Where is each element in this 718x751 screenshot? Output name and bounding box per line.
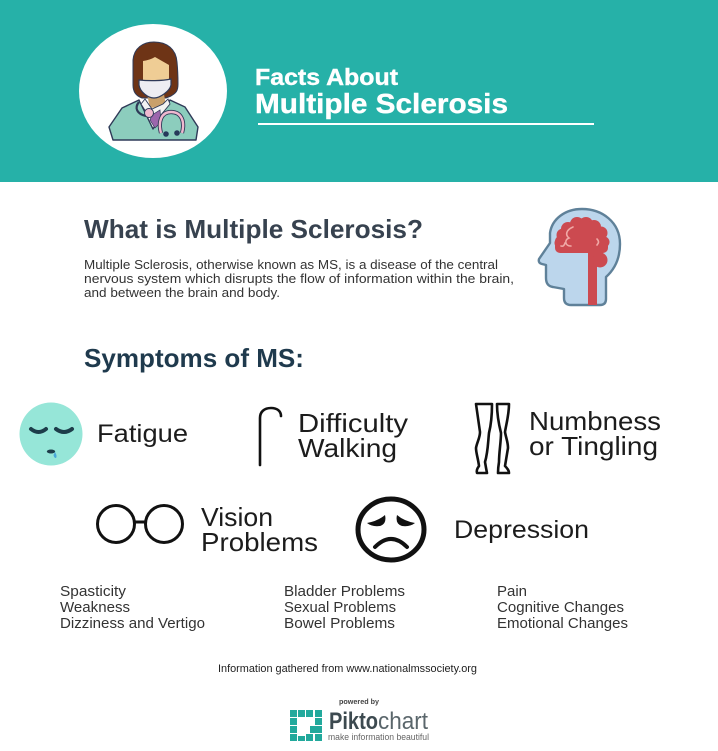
list: other symptoms column 2 <box>284 583 405 632</box>
list: other symptoms column 1: Weakness <box>60 599 130 616</box>
list: other symptoms column 1 <box>60 583 205 632</box>
symptom: numbness or tingling <box>476 404 661 473</box>
list: other symptoms column 3: Cognitive Changes <box>497 599 624 616</box>
list: other symptoms column 3 <box>497 583 628 632</box>
list: other symptoms column 2: Bladder Problems <box>284 583 405 600</box>
heading: symptoms: Symptoms of MS: <box>84 343 304 373</box>
label: difficulty walking: Difficulty <box>298 408 408 438</box>
icon: cane <box>260 408 281 465</box>
text block: definition: Multiple Sclerosis, otherwise known as MS, is a disease of the central <box>84 257 498 272</box>
piktochart logo: make information beautiful <box>328 732 429 742</box>
label: difficulty walking <box>298 408 408 463</box>
list: other symptoms column 2: Bowel Problems <box>284 615 395 632</box>
label: vision problems: Problems <box>201 527 318 557</box>
title: Multiple Sclerosis <box>255 88 508 119</box>
icon: sleepy face <box>20 402 82 466</box>
label: numbness or tingling: Numbness <box>529 406 661 436</box>
icon: legs <box>476 404 509 473</box>
piktochart logo: powered by <box>339 697 380 706</box>
list: other symptoms column 2: Sexual Problems <box>284 599 396 616</box>
label: vision problems: Vision <box>201 502 273 532</box>
symptom: depression: Depression <box>454 516 589 544</box>
header banner <box>0 0 718 182</box>
list: other symptoms column 1: Dizziness and Vertigo <box>60 615 205 632</box>
text block: definition: nervous system which disrupts the flow of information within the brain, <box>84 271 514 286</box>
icon: doctor in mask <box>79 24 227 158</box>
symptom: depression <box>358 499 589 560</box>
symptom: difficulty walking <box>260 408 408 465</box>
icon: head with brain <box>539 209 620 305</box>
icon: glasses <box>98 506 182 542</box>
heading: what is MS: What is Multiple Sclerosis? <box>84 214 423 244</box>
symptom: vision problems <box>98 502 318 557</box>
list: other symptoms column 1: Spasticity <box>60 583 126 600</box>
label: numbness or tingling <box>529 406 661 461</box>
label: numbness or tingling: or Tingling <box>529 431 658 461</box>
icon: logo mark <box>290 710 322 741</box>
list: other symptoms column 3: Emotional Changes <box>497 615 628 632</box>
text block: definition <box>84 257 514 300</box>
label: vision problems <box>201 502 318 557</box>
list: other symptoms column 3: Pain <box>497 583 527 600</box>
symptom: fatigue <box>20 402 188 466</box>
piktochart logo <box>290 697 429 742</box>
icon: sad face <box>358 499 424 560</box>
piktochart logo: Pikto <box>329 708 378 735</box>
source note: Information gathered from www.nationalmssociety.org <box>218 663 477 675</box>
title <box>255 64 508 119</box>
symptom: fatigue: Fatigue <box>97 420 188 448</box>
label: difficulty walking: Walking <box>298 433 397 463</box>
title: Facts About <box>255 64 398 90</box>
piktochart logo: chart <box>378 708 428 735</box>
text block: definition: and between the brain and body. <box>84 285 280 300</box>
